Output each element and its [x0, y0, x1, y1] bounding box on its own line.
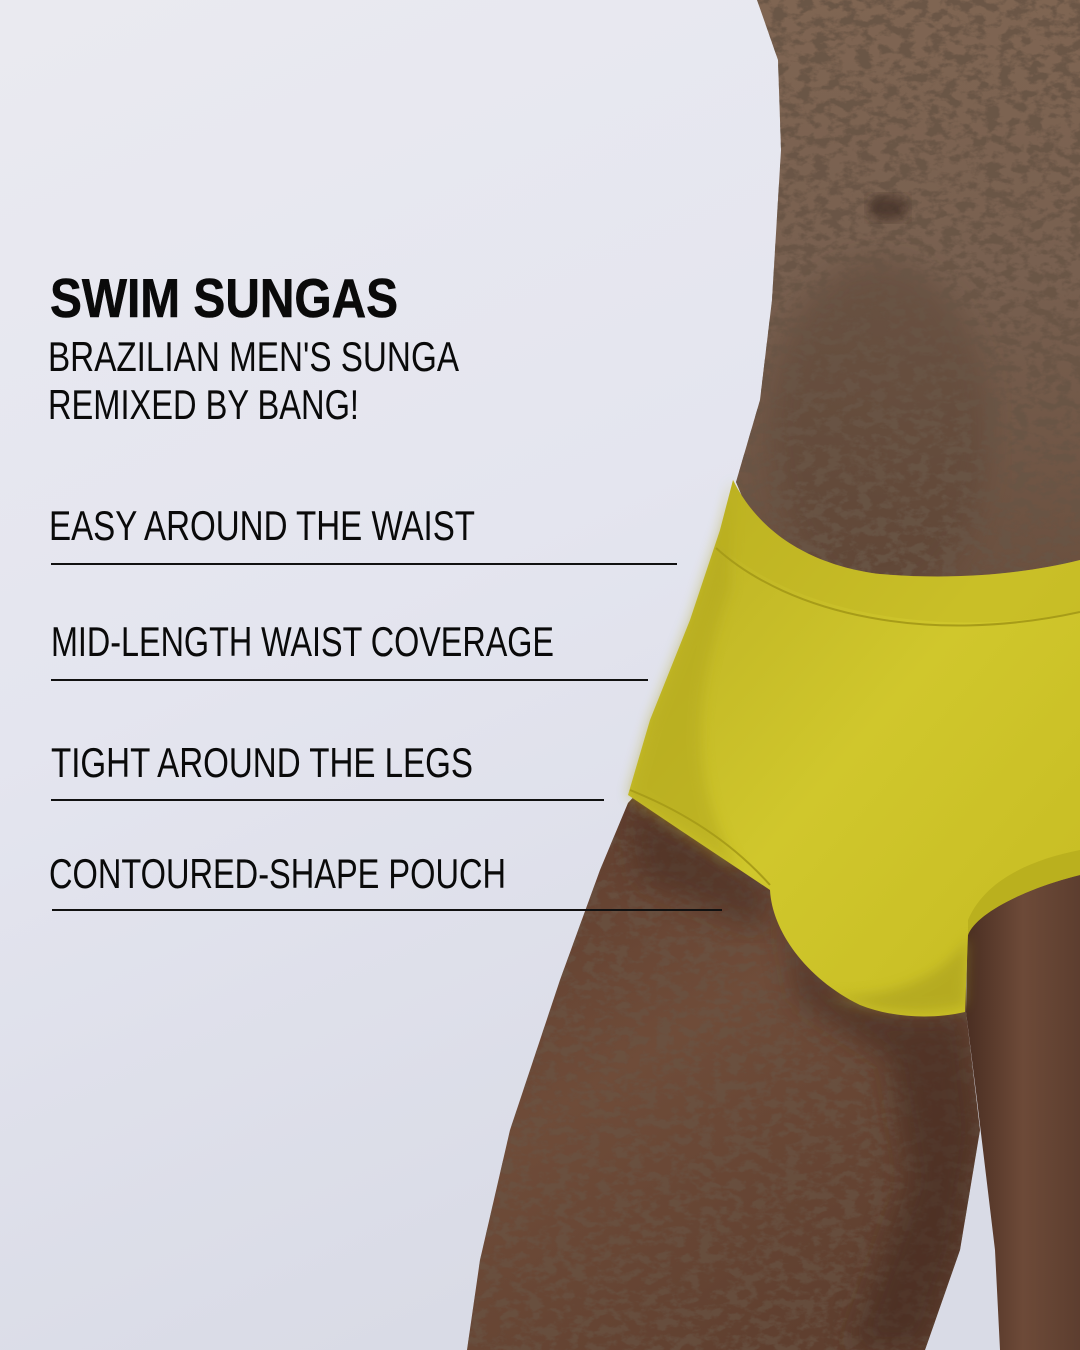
torso	[730, 0, 1080, 600]
photo: model in yellow swim sunga	[467, 0, 1080, 1350]
feature: mid-length waist coverage: MID-LENGTH WAIST COVERAGE	[51, 618, 554, 665]
feature: contoured-shape pouch: CONTOURED-SHAPE POUCH	[49, 850, 506, 897]
subtitle: BRAZILIAN MEN'S SUNGA	[48, 333, 459, 380]
left thigh	[467, 790, 982, 1350]
right thigh	[966, 850, 1080, 1350]
subtitle	[48, 333, 459, 428]
feature: easy around the waist: EASY AROUND THE WAIST	[49, 502, 475, 549]
yellow sunga	[628, 480, 1080, 1016]
title: SWIM SUNGAS	[50, 267, 398, 329]
subtitle: REMIXED BY BANG!	[48, 381, 359, 428]
feature: tight around the legs: TIGHT AROUND THE LEGS	[51, 739, 473, 786]
